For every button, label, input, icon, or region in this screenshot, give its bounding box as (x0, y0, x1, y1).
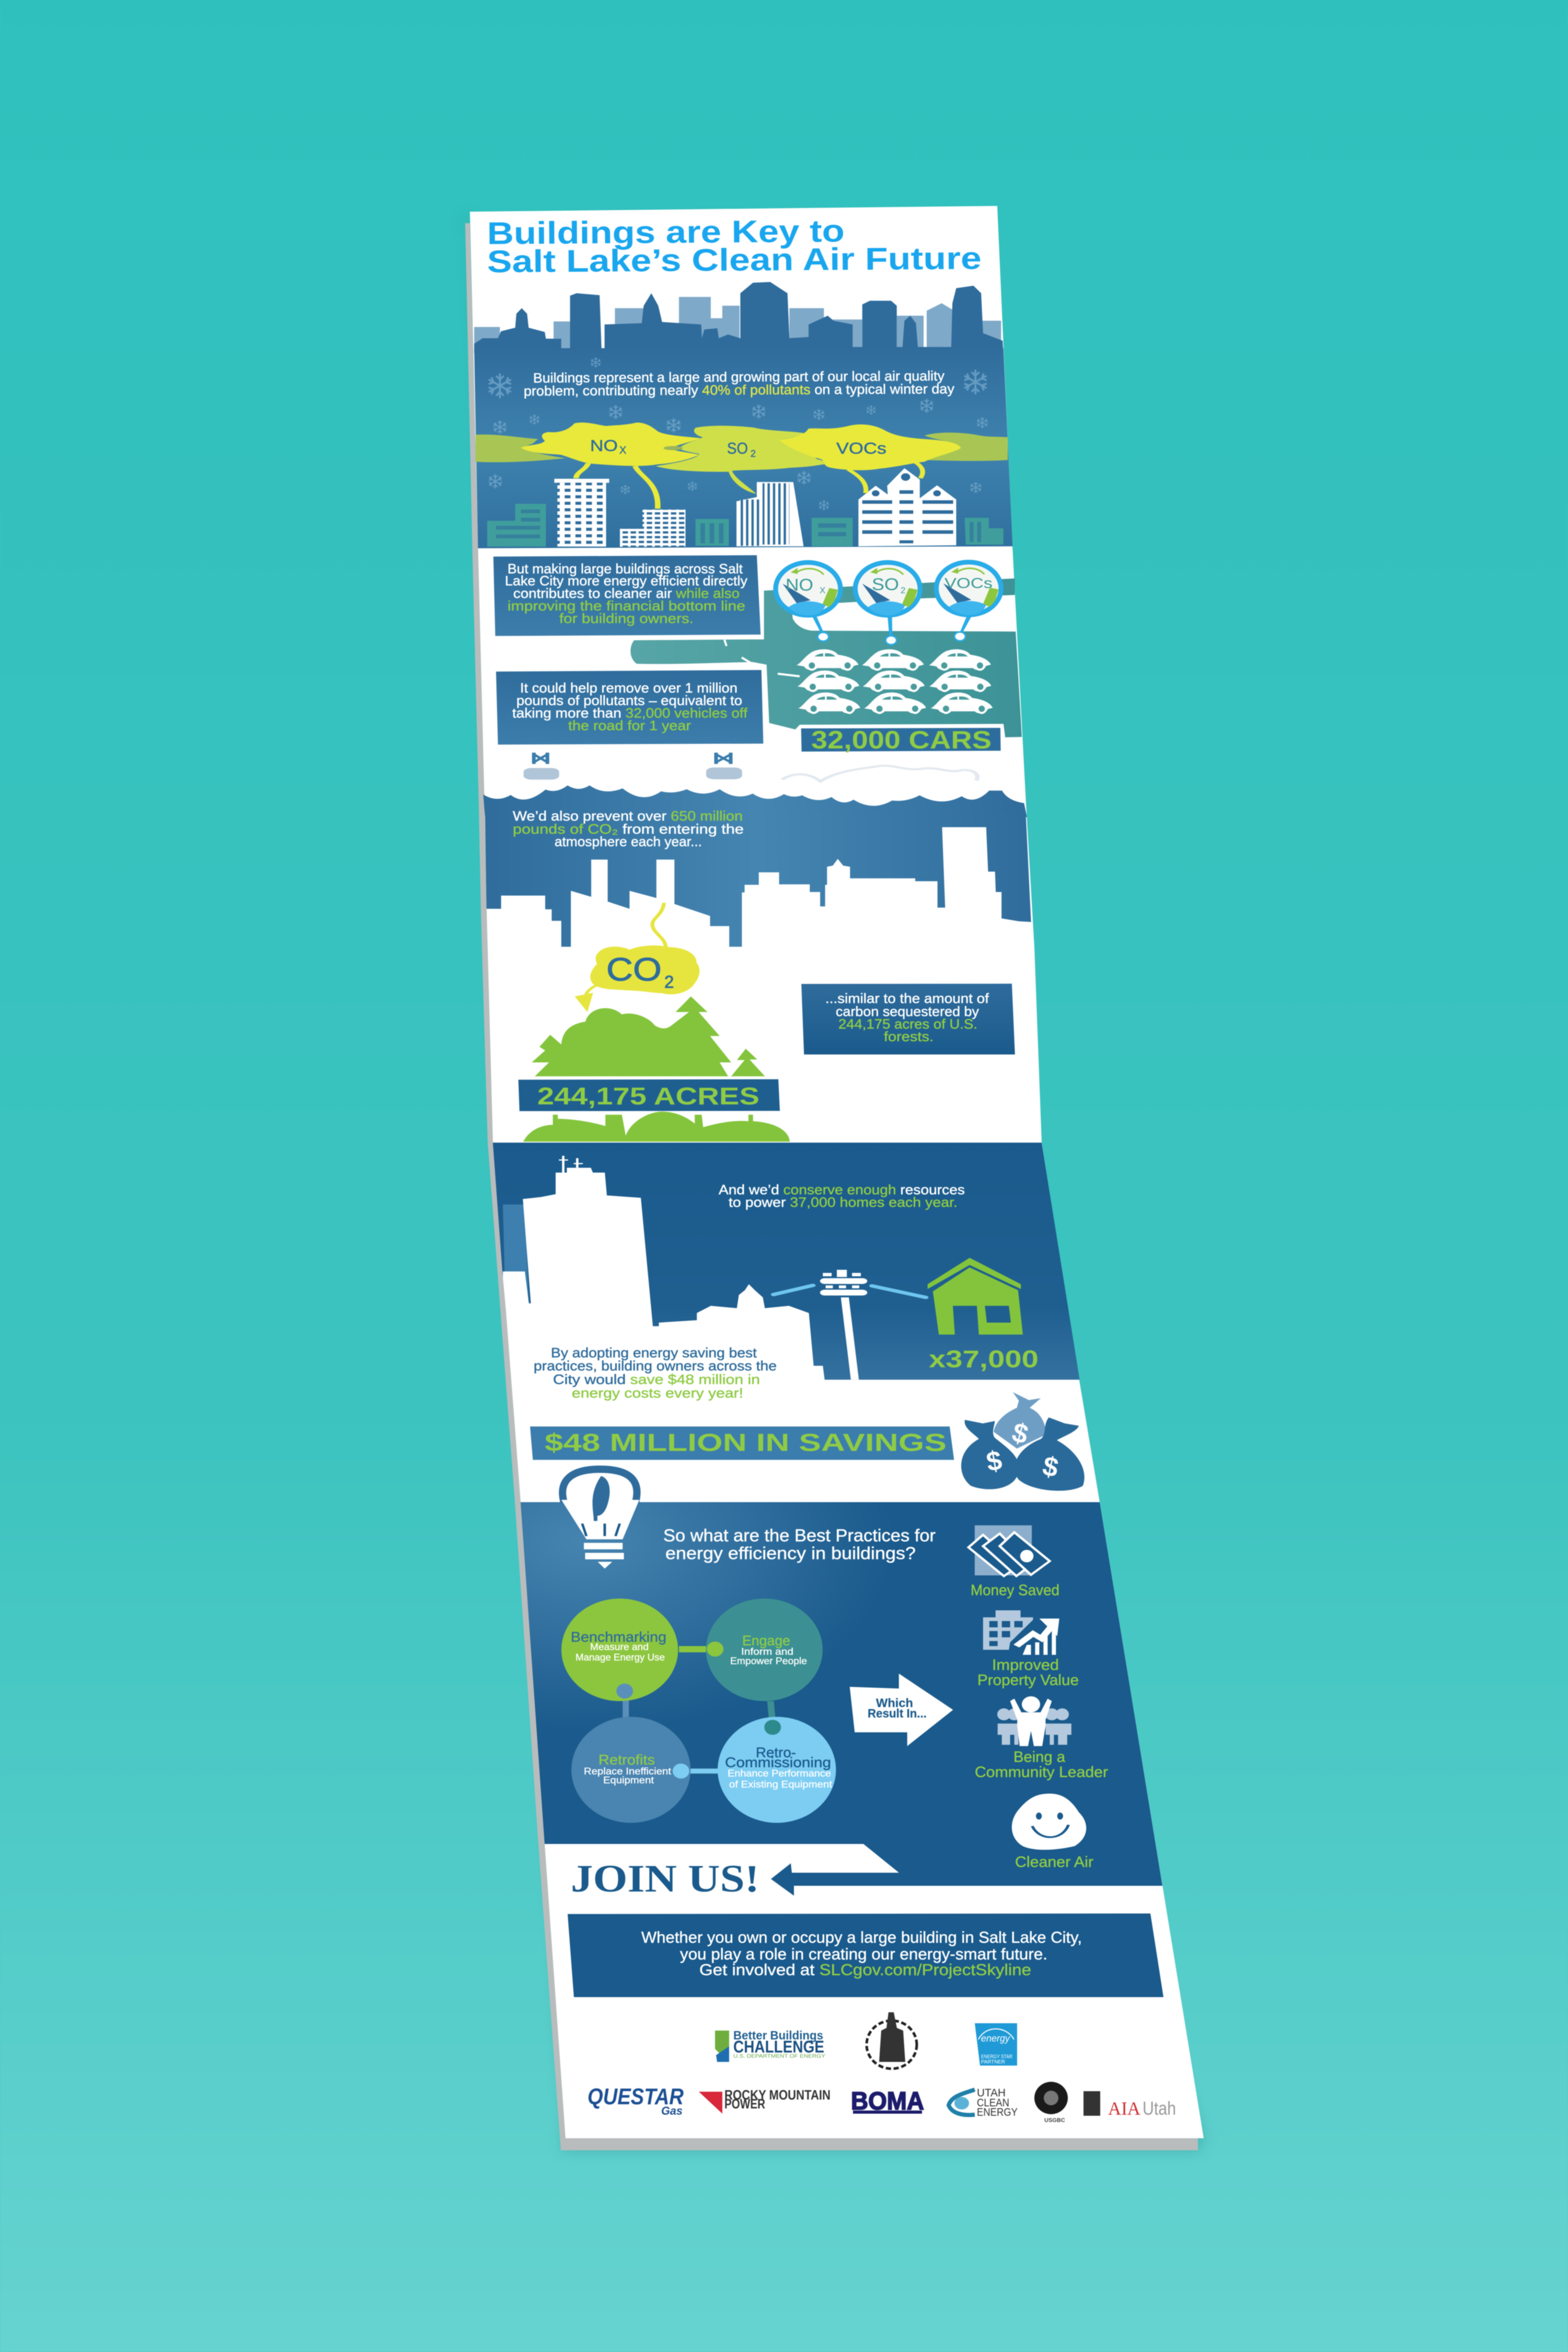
dollar signs (984, 1417, 1061, 1483)
text: retro-commissioning (725, 1745, 832, 1790)
callout: get involved (568, 1913, 1163, 1997)
text: engage (730, 1633, 807, 1666)
logo: rocky mountain power: POWER (724, 2096, 765, 2112)
box: sequestered (801, 984, 1015, 1055)
logo: utah clean energy: ENERGY (977, 2106, 1018, 2118)
panel: winter air pollution (474, 282, 1012, 548)
forest (523, 996, 790, 1142)
arrow down to forest (575, 983, 601, 1012)
logo: BOMA: BOMA (851, 2088, 924, 2115)
text: retro-commissioning: Enhance Performance (728, 1768, 831, 1779)
outcome labels: Community Leader (975, 1764, 1108, 1781)
text: prevent CO2: pounds of CO₂ from entering the (513, 821, 744, 837)
text: similar to forests (825, 990, 989, 1044)
panel: homes and savings (493, 1143, 1085, 1491)
text: adopting best practices: City would save $48 million in (553, 1371, 760, 1387)
CO2 cloud (590, 946, 699, 995)
circle: retrofits (571, 1717, 690, 1823)
text: retro-commissioning: Retro- (756, 1745, 796, 1760)
striped tower (736, 482, 803, 546)
text: retro-commissioning: Commissioning (725, 1755, 831, 1770)
gauge labels (786, 575, 993, 595)
CO2 smoke stem (652, 903, 666, 950)
gauge labels: 2 (901, 585, 905, 595)
logo: better buildings challenge: Better Buildings (733, 2028, 823, 2042)
gauge labels: SO (872, 575, 899, 594)
power pole (820, 1270, 867, 1380)
text: prevent CO2: We’d also prevent over 650 million (513, 808, 743, 824)
text: retrofits: Replace Inefficient (584, 1766, 671, 1777)
text: similar to forests: forests. (884, 1029, 933, 1044)
page: paper sheet (465, 206, 1204, 2150)
pollutant labels: 2 (751, 448, 756, 459)
circle: retro-commissioning (718, 1717, 836, 1823)
title: Salt Lake’s Clean Air Future (487, 240, 982, 279)
text: benchmarking: Measure and (590, 1642, 649, 1652)
box: cleaner air (493, 555, 760, 636)
heading: join us: JOIN US! (571, 1858, 759, 1900)
skyline background (474, 297, 1001, 351)
pollutant labels: NO (590, 436, 618, 455)
outcome labels: Cleaner Air (1015, 1854, 1093, 1871)
text: best practices question: energy efficiency in buildings? (665, 1543, 916, 1563)
intro text (524, 368, 954, 399)
arrow: which result in (850, 1674, 953, 1746)
intro text: problem, contributing nearly 40% of pollutants on a typical winter day (524, 381, 954, 399)
CO2 label: 2 (664, 972, 674, 991)
text: retro-commissioning: of Existing Equipment (729, 1779, 832, 1790)
icon: light bulb (561, 1469, 639, 1569)
teal backdrop (630, 579, 1022, 737)
box: 32,000 cars (800, 727, 1002, 753)
skyline foreground (474, 282, 1004, 353)
callout: get involved: Get involved at SLCgov.com/ProjectSkyline (699, 1961, 1031, 1979)
logo: utah clean energy: UTAH (977, 2087, 1006, 2099)
logo: rocky mountain power: ROCKY MOUNTAIN (724, 2087, 831, 2103)
logo: AIA Utah: Utah (1143, 2097, 1176, 2119)
text: prevent CO2: atmosphere each year... (555, 834, 702, 849)
text: which result in: Result In... (868, 1707, 927, 1720)
dark blue panel (493, 1143, 1080, 1380)
gauge VOCs (934, 560, 1004, 642)
connectors (622, 1646, 776, 1773)
title (487, 213, 982, 279)
text: conserve: to power 37,000 homes each year. (729, 1194, 958, 1210)
icon: community (997, 1697, 1071, 1746)
icon: money (969, 1525, 1050, 1576)
text: adopting best practices: By adopting energy saving best (551, 1345, 757, 1361)
connector dots (616, 1642, 781, 1779)
white skyline (503, 1156, 825, 1381)
text: best practices question: So what are the Best Practices for (663, 1526, 936, 1545)
icon: smiling cloud (1012, 1794, 1086, 1850)
gauge labels: VOCs (944, 575, 993, 591)
text: best practices question (663, 1526, 936, 1563)
logo: questar (587, 2084, 684, 2117)
intro text: Buildings represent a large and growing part of our local air quality (533, 368, 944, 386)
text: cleaner air: contributes to cleaner air while also (513, 585, 740, 601)
smog band left (476, 434, 566, 462)
dollar signs: $ (984, 1445, 1005, 1478)
pollutant labels (590, 436, 886, 459)
panel: CO2 and forests (483, 786, 1031, 1142)
text: retrofits: Equipment (603, 1775, 654, 1785)
gauge labels: NO (786, 575, 813, 594)
pollutant labels: SO (727, 439, 748, 457)
blue panel (474, 348, 1012, 548)
logo: energy star: PARTNER (981, 2059, 1005, 2065)
smog cloud: NOx (521, 422, 701, 509)
logo: energy star: ENERGY STAR (981, 2054, 1012, 2060)
outcome labels: Being a (1013, 1749, 1066, 1766)
logo: rocky mountain power (699, 2087, 831, 2114)
text: similar to forests: 244,175 acres of U.S. (838, 1016, 977, 1032)
logo: energy star (975, 2023, 1017, 2066)
logo: AIA Utah: AIA (1108, 2098, 1140, 2119)
back tower (503, 1205, 531, 1304)
heading: 32,000 cars: 32,000 CARS (811, 727, 991, 754)
panel: best practices (521, 1469, 1162, 1896)
pollutant labels: VOCs (836, 439, 886, 457)
signpost legs (534, 753, 731, 764)
text: engage: Inform and (741, 1646, 793, 1657)
smog cloud: VOCs (779, 424, 961, 493)
logo: better buildings challenge: CHALLENGE (733, 2037, 824, 2056)
text: conserve: And we’d conserve enough resources (719, 1182, 965, 1197)
panel: cars and gauges (493, 555, 1022, 781)
text: cleaner air: for building owners. (559, 610, 694, 626)
text: cleaner air: improving the financial bottom line (508, 598, 745, 614)
outcome labels (971, 1582, 1108, 1871)
logo: AIA Utah (1083, 2091, 1176, 2119)
blue sky with skyline cutout (485, 812, 1031, 947)
smog spot (663, 446, 683, 450)
logo: better buildings challenge: U.S. DEPARTMENT OF ENERGY (733, 2054, 825, 2059)
teal background buildings (487, 504, 1004, 547)
text: cleaner air (505, 561, 747, 626)
circle: benchmarking (561, 1598, 678, 1701)
dollar signs: $ (1009, 1417, 1031, 1450)
text: adopting best practices: practices, building owners across the (534, 1358, 777, 1374)
savings banner (530, 1426, 954, 1460)
outcome labels: Property Value (977, 1672, 1079, 1689)
x37,000: x37,000 (929, 1345, 1039, 1373)
icon: property value (983, 1610, 1062, 1655)
box: pollutants (496, 670, 763, 745)
text: which result in: Which (876, 1696, 913, 1710)
logo: questar: Gas (661, 2104, 683, 2117)
dollar signs: $ (1040, 1451, 1061, 1483)
office tower with windows (555, 479, 609, 547)
text: engage: Empower People (730, 1656, 807, 1666)
cars grid (797, 649, 993, 714)
smog cloud: SO2 (656, 425, 827, 494)
gabled buildings (858, 468, 956, 546)
text: benchmarking: Manage Energy Use (575, 1652, 665, 1663)
partner logos (587, 2012, 1176, 2124)
icon: money bags (961, 1392, 1085, 1491)
logo: USGBC: USGBC (1044, 2117, 1065, 2124)
callout: get involved: you play a role in creating our energy-smart future. (680, 1945, 1047, 1963)
text: pollutants removed (512, 680, 748, 733)
icon: house (928, 1258, 1023, 1334)
text: similar to forests: carbon sequestered by (836, 1004, 979, 1019)
text: benchmarking: Benchmarking (571, 1629, 666, 1645)
text: conserve (719, 1182, 965, 1210)
text: adopting best practices (534, 1345, 777, 1401)
faint cloud (782, 766, 977, 781)
heading: acres: 244,175 ACRES (537, 1082, 759, 1110)
blue sky with scalloped clouds (483, 786, 1027, 817)
outcome labels: Money Saved (971, 1582, 1059, 1599)
text: engage: Engage (742, 1633, 790, 1648)
CO2 label (606, 952, 674, 991)
gauge NOx (773, 560, 843, 642)
text: pollutants removed: taking more than 32,000 vehicles off (512, 705, 748, 721)
wires (774, 1285, 926, 1297)
smog band right (921, 433, 1008, 461)
logo: utah clean energy (949, 2087, 1018, 2118)
logo: energy star: energy (981, 2033, 1010, 2044)
text: pollutants removed: It could help remove over 1 million (520, 680, 737, 696)
text: prevent CO2 (513, 808, 744, 849)
text: retrofits (584, 1752, 671, 1785)
callout: get involved: Whether you own or occupy a large building in Salt Lake City, (641, 1928, 1082, 1946)
text: cleaner air: But making large buildings across Salt (508, 561, 743, 577)
CO2 label: CO (606, 952, 662, 988)
road dashes (724, 640, 800, 676)
logo: utah clean energy: CLEAN (977, 2097, 1009, 2109)
snowflakes (489, 358, 987, 510)
text: cleaner air: Lake City more energy efficient directly (505, 573, 747, 589)
text: adopting best practices: energy costs every year! (572, 1385, 743, 1401)
pollutant labels: X (619, 445, 626, 456)
signpost bases (524, 767, 742, 780)
text: pollutants removed: the road for 1 year (568, 718, 691, 733)
heading: savings: $48 MILLION IN SAVINGS (545, 1428, 947, 1456)
gauge SO2 (853, 560, 923, 645)
circle: engage (706, 1598, 823, 1701)
text: pollutants removed: pounds of pollutants – equivalent to (516, 693, 742, 708)
logo: USGBC (1034, 2082, 1068, 2124)
logo: city seal (867, 2012, 917, 2069)
text: which result in (868, 1696, 927, 1720)
logo: questar: QUESTAR (587, 2084, 684, 2109)
logo: better buildings challenge (715, 2028, 825, 2062)
gauge labels: X (820, 585, 825, 595)
mid-rise pair with windows (620, 510, 685, 547)
outcome labels: Improved (992, 1657, 1059, 1674)
text: similar to forests: ...similar to the amount of (825, 990, 989, 1006)
acres banner (518, 1079, 780, 1111)
text: benchmarking (571, 1629, 666, 1663)
text: retrofits: Retrofits (598, 1752, 655, 1768)
title: Buildings are Key to (487, 213, 845, 251)
